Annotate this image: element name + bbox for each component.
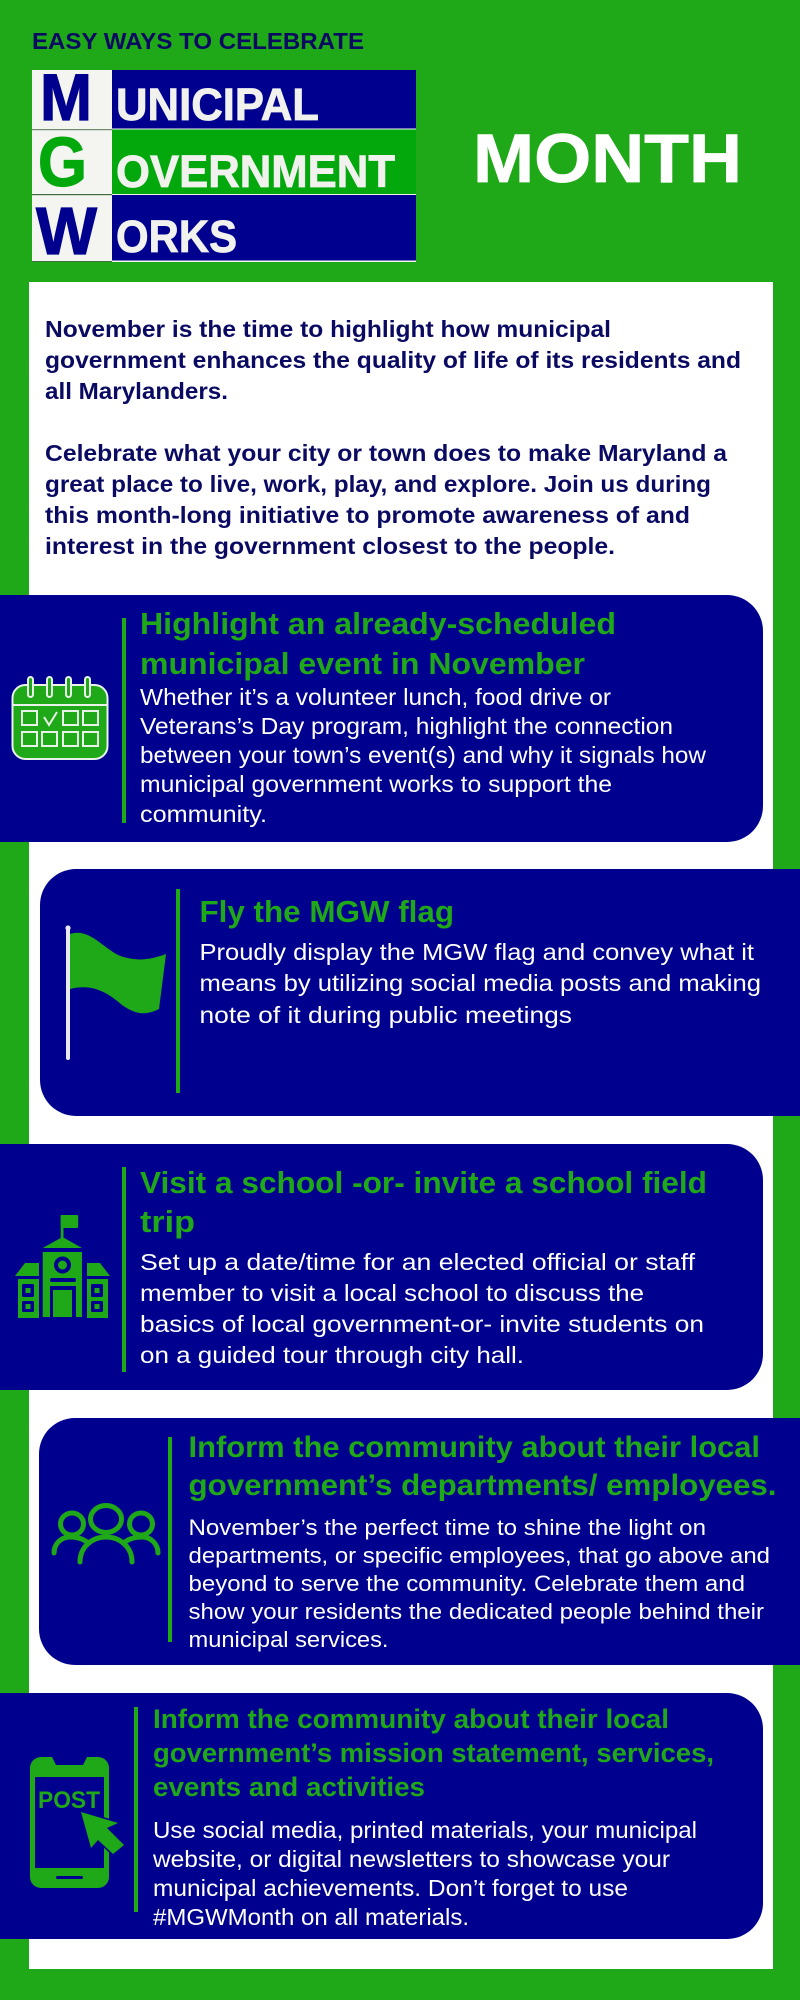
panel: fly the MGW flag [40, 869, 800, 1116]
card heading: municipal event in November [140, 646, 585, 681]
card body text: member to visit a local school to discuss the [140, 1280, 644, 1306]
card body text: community. [140, 801, 267, 827]
intro text [45, 316, 741, 559]
card body text: Use social media, printed materials, your municipal [153, 1817, 697, 1843]
white content panel [29, 282, 773, 1969]
intro text: November is the time to highlight how municipal [45, 316, 611, 342]
card body text: show your residents the dedicated people behind their [188, 1599, 764, 1624]
card body text: website, or digital newsletters to showcase your [152, 1846, 670, 1872]
card heading: trip [140, 1204, 195, 1239]
card body text: Veterans’s Day program, highlight the connection [140, 713, 673, 739]
icon: flag [65, 925, 166, 1060]
icon: school building [15, 1215, 110, 1318]
icon: phone with POST and cursor: POST [38, 1787, 100, 1814]
card body text: November’s the perfect time to shine the light on [188, 1515, 706, 1540]
card body text: between your town’s event(s) and why it signals how [140, 742, 706, 768]
heading: easy ways to celebrate: EASY WAYS TO CELEBRATE [32, 28, 364, 54]
icon: group of people [54, 1506, 158, 1562]
panel: departments and employees [39, 1418, 800, 1665]
card body text: basics of local government-or- invite students on [140, 1311, 704, 1337]
logo: Municipal Government Works: OVERNMENT [116, 146, 395, 197]
card heading: Fly the MGW flag [200, 894, 454, 929]
card body text: on a guided tour through city hall. [140, 1342, 524, 1368]
card body text [200, 939, 761, 1028]
card heading: Inform the community about their local [188, 1431, 760, 1464]
card body text: beyond to serve the community. Celebrate them and [188, 1571, 745, 1596]
card body text: municipal government works to support the [140, 771, 612, 797]
card heading [140, 606, 616, 681]
intro text: great place to live, work, play, and explore. Join us during [45, 471, 711, 497]
card body text: means by utilizing social media posts and making [200, 970, 761, 996]
logo: Municipal Government Works: G [38, 123, 87, 201]
card heading [153, 1704, 714, 1802]
panel: visit a school [0, 1144, 763, 1390]
card heading: government’s departments/ employees. [188, 1469, 776, 1502]
icon: phone with POST and cursor [30, 1757, 124, 1888]
logo: Municipal Government Works: M [40, 60, 92, 134]
card body text [188, 1515, 770, 1652]
card body text: Proudly display the MGW flag and convey what it [200, 939, 755, 965]
card body text: municipal services. [188, 1627, 388, 1652]
card body text [140, 684, 706, 827]
card body text: municipal achievements. Don’t forget to use [153, 1875, 628, 1901]
intro text: government enhances the quality of life of its residents and [45, 347, 741, 373]
intro text: interest in the government closest to the people. [45, 533, 615, 559]
logo: Municipal Government Works: W [36, 194, 98, 269]
intro text: this month-long initiative to promote awareness of and [45, 502, 690, 528]
logo: Municipal Government Works: UNICIPAL [116, 79, 319, 130]
card heading: government’s mission statement, services, [153, 1738, 714, 1768]
logo: Municipal Government Works: ORKS [116, 211, 237, 262]
card heading: Highlight an already-scheduled [140, 606, 616, 641]
card heading: events and activities [153, 1772, 425, 1802]
panel: mission statement and services [0, 1693, 763, 1939]
card heading [140, 1165, 707, 1239]
card body text: Whether it’s a volunteer lunch, food drive or [140, 684, 611, 710]
card body text: departments, or specific employees, that go above and [188, 1543, 770, 1568]
card body text [140, 1249, 704, 1368]
heading: MONTH: MONTH [473, 120, 742, 197]
icon: calendar [12, 677, 108, 759]
card body text [152, 1817, 697, 1930]
intro text: all Marylanders. [45, 378, 228, 404]
card body text: Set up a date/time for an elected official or staff [140, 1249, 696, 1275]
logo: Municipal Government Works [32, 60, 416, 269]
intro text: Celebrate what your city or town does to make Maryland a [45, 440, 728, 466]
card body text: note of it during public meetings [200, 1002, 572, 1028]
card heading: Visit a school -or- invite a school field [140, 1165, 707, 1200]
card heading [188, 1431, 776, 1502]
card heading: Inform the community about their local [153, 1704, 669, 1734]
panel: highlight a municipal event [0, 595, 763, 842]
card body text: #MGWMonth on all materials. [153, 1904, 469, 1930]
